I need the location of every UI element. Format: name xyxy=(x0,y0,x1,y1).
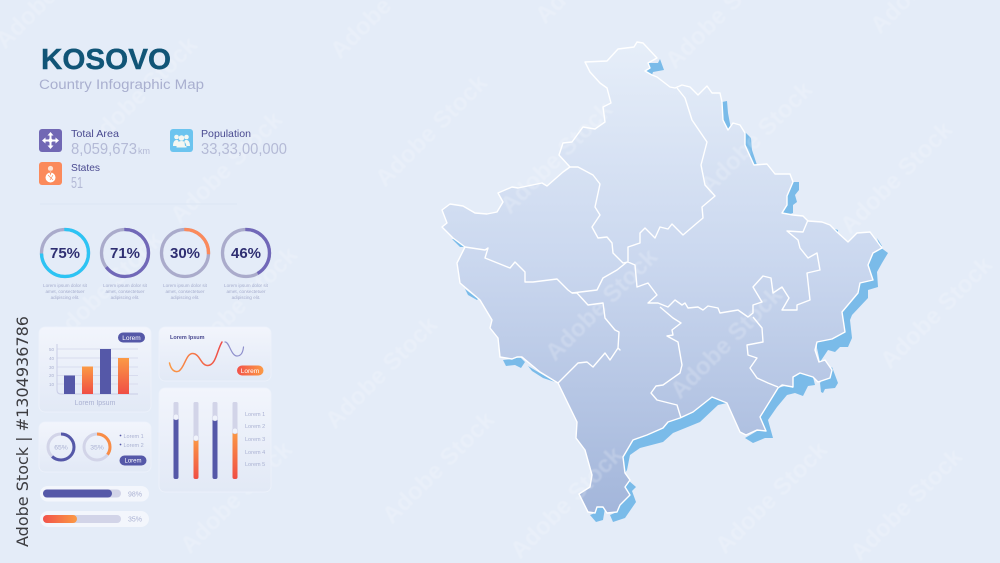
watermark: Adobe Stock xyxy=(875,251,998,374)
panel: sliders xyxy=(159,388,271,492)
map region borders xyxy=(465,88,820,418)
panel: bar chart: 40 xyxy=(49,356,54,361)
map: Kosovo xyxy=(442,42,888,522)
donut stats row xyxy=(42,230,270,300)
donut: 65%: 65% xyxy=(54,444,68,452)
panel: sliders: Lorem 1 xyxy=(245,412,265,418)
donut: 30%: Lorem ipsum dolor sit xyxy=(163,283,208,288)
watermark: Adobe Stock xyxy=(665,281,788,404)
watermark: Adobe Stock xyxy=(165,106,288,229)
progress bar: 98% xyxy=(40,486,149,502)
watermark: Adobe Stock xyxy=(835,116,958,239)
panel: bar chart: 10 xyxy=(49,382,54,387)
stat: states: States xyxy=(71,162,100,174)
watermark: Adobe Stock xyxy=(320,311,443,434)
button: Lorem xyxy=(122,335,141,342)
donut: 75%: adipiscing elit. xyxy=(51,295,79,300)
icon: people xyxy=(170,129,193,152)
watermark: Adobe Stock xyxy=(377,406,500,529)
stat: population: 33,33,00,000 xyxy=(201,141,287,158)
panel: sliders: Lorem 2 xyxy=(245,424,265,430)
bars xyxy=(64,349,129,394)
stat: total area: km xyxy=(138,146,150,156)
purple wave xyxy=(225,342,244,356)
orange wave xyxy=(170,342,222,372)
watermark: Adobe Stock xyxy=(80,31,203,154)
panel: sliders: Lorem 5 xyxy=(245,462,265,468)
panel: bar chart xyxy=(39,327,151,412)
donut: 46%: Lorem ipsum dolor sit xyxy=(224,283,269,288)
watermark: Adobe Stock xyxy=(540,243,663,366)
slider handles xyxy=(173,414,238,441)
watermark: Adobe Stock xyxy=(45,226,168,349)
progress bar: 35%: 35% xyxy=(128,516,142,524)
donut: 71%: 71% xyxy=(110,245,140,262)
donut: 75%: 75% xyxy=(50,245,80,262)
donut: 35%: 35% xyxy=(90,444,104,452)
progress bar: 98%: 98% xyxy=(128,492,142,498)
panel: line chart: Lorem Ipsum xyxy=(170,335,205,341)
progress bar: 35% xyxy=(40,511,149,527)
map land xyxy=(442,42,882,513)
donut: 71%: amet, consectetuer xyxy=(105,289,145,294)
watermark: Adobe Stock xyxy=(180,241,303,364)
donut: 46% xyxy=(222,230,270,300)
legend: Lorem 1 xyxy=(124,434,144,440)
panel: small donuts xyxy=(39,422,151,472)
watermark: Adobe Stock xyxy=(505,441,628,563)
donut: 46%: amet, consectetuer xyxy=(226,289,266,294)
donut: 71%: Lorem ipsum dolor sit xyxy=(103,283,148,288)
donut: 75% xyxy=(42,230,88,300)
stat: total area: 8,059,673 xyxy=(71,141,137,158)
panel: bar chart: 30 xyxy=(49,365,54,370)
watermark: Adobe Stock xyxy=(695,76,818,199)
donut: 30%: 30% xyxy=(170,245,200,262)
subtitle: Country Infographic Map xyxy=(39,77,204,92)
panel: line chart xyxy=(159,327,271,381)
panel: sliders: Lorem 4 xyxy=(245,450,265,456)
watermark: Adobe Stock xyxy=(370,69,493,192)
icon: pin and globe xyxy=(39,162,62,185)
donut: 71%: adipiscing elit. xyxy=(111,295,139,300)
donut: 46%: adipiscing elit. xyxy=(232,295,260,300)
donut: 30% xyxy=(162,230,208,300)
stat: population xyxy=(170,128,287,158)
stat: total area: Total Area xyxy=(71,128,119,140)
donut: 30%: amet, consectetuer xyxy=(165,289,205,294)
donut: 75%: Lorem ipsum dolor sit xyxy=(43,283,88,288)
panel: bar chart: Lorem Ipsum xyxy=(75,400,116,407)
stat: population: Population xyxy=(201,128,251,140)
donut: 71% xyxy=(102,230,148,300)
donut: 30%: adipiscing elit. xyxy=(171,295,199,300)
stock id side text: Adobe Stock | #1304936786 xyxy=(13,316,32,547)
title: KOSOVO xyxy=(41,44,171,76)
panel: sliders: Lorem 3 xyxy=(245,437,265,443)
panel: bar chart: 20 xyxy=(49,373,54,378)
watermark: Adobe Stock xyxy=(495,96,618,219)
legend xyxy=(120,434,144,449)
button: Lorem xyxy=(241,368,259,375)
button: Lorem xyxy=(124,459,142,465)
panel: bar chart: 50 xyxy=(49,347,54,352)
icon: arrows xyxy=(39,129,62,152)
watermark: Adobe Stock xyxy=(710,436,833,559)
watermark: Adobe Stock xyxy=(845,443,968,563)
stat: states: 51 xyxy=(71,175,83,192)
map shadow: blue offset edges xyxy=(452,59,888,522)
stat: states xyxy=(39,162,100,192)
watermark: Adobe Stock xyxy=(175,436,298,559)
stat: total area xyxy=(39,128,150,158)
donut: 75%: amet, consectetuer xyxy=(45,289,85,294)
legend: Lorem 2 xyxy=(124,443,144,449)
slider fills xyxy=(174,417,238,479)
donut: 46%: 46% xyxy=(231,245,261,262)
